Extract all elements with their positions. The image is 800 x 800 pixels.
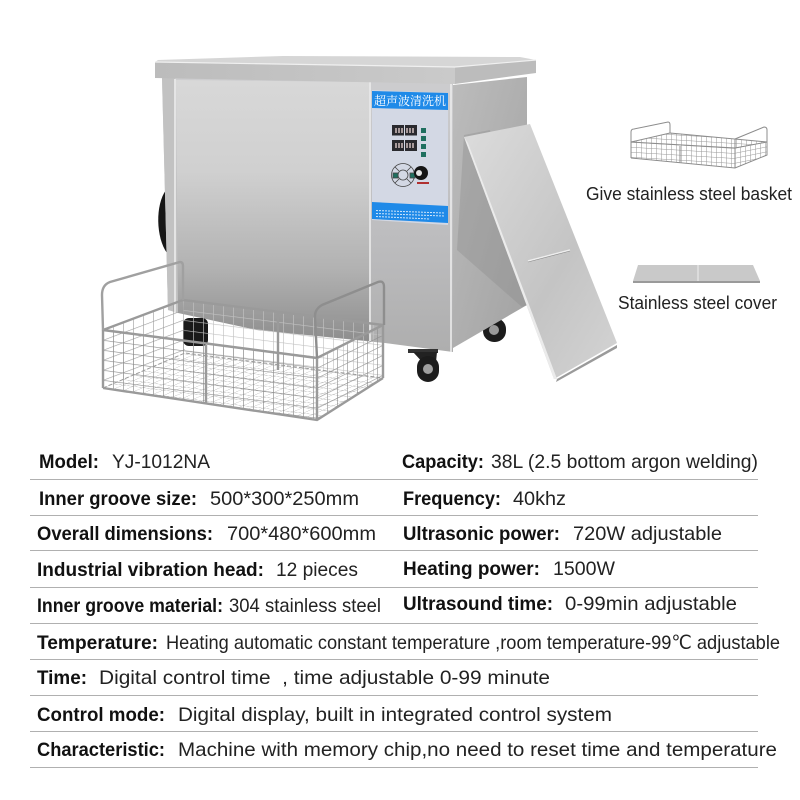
row: time: Digital control time , time adjustable 0-99 minute — [99, 667, 550, 689]
basket right handle — [315, 282, 384, 358]
row: ultrasonic power: Ultrasonic power: — [403, 524, 560, 545]
row: industrial vibration head: 12 pieces — [276, 559, 358, 581]
caption: basket: Give stainless steel basket — [586, 183, 792, 204]
row: model: Model: — [39, 452, 99, 473]
row: inner groove material — [37, 595, 381, 617]
caption: cover: Stainless steel cover — [618, 292, 777, 313]
row: inner groove size — [39, 488, 359, 510]
row: control mode: Digital display, built in integrated control system — [178, 704, 612, 726]
row: ultrasound time: 0-99min adjustable — [565, 593, 737, 615]
small basket thumbnail — [631, 122, 767, 168]
row: ultrasound time: Ultrasound time: — [403, 594, 553, 615]
row: ultrasonic power: 720W adjustable — [573, 523, 722, 545]
basket caster seen through mesh — [183, 318, 208, 346]
machine front body — [162, 78, 453, 352]
row: overall dimensions: Overall dimensions: — [37, 524, 213, 545]
blue panel heading: 超声波清洗机 — [374, 93, 446, 108]
row: ultrasound time — [403, 593, 737, 615]
circular control pad — [392, 164, 415, 186]
basket frame — [103, 300, 383, 420]
top rim — [155, 56, 536, 84]
row: temperature: Temperature: — [37, 633, 158, 654]
row: ultrasonic power — [403, 523, 722, 545]
foreground wire basket — [102, 262, 384, 420]
side handle — [158, 190, 167, 253]
row: frequency — [403, 488, 566, 510]
adjustment knob — [414, 166, 429, 184]
row: characteristic: Characteristic: — [37, 740, 165, 761]
row: inner groove size: 500*300*250mm — [210, 488, 359, 510]
row: frequency: 40khz — [513, 488, 566, 510]
blue notice strip — [372, 202, 448, 223]
row: industrial vibration head: Industrial vibration head: — [37, 560, 264, 581]
small cover thumbnail — [633, 265, 760, 283]
digital displays — [392, 125, 417, 151]
row: inner groove material: 304 stainless steel — [229, 595, 381, 617]
front caster wheel — [408, 349, 439, 382]
back caster wheel — [483, 318, 506, 342]
row: frequency: Frequency: — [403, 489, 501, 510]
front large panel — [176, 80, 369, 341]
control panel — [372, 90, 448, 225]
row: heating power — [403, 558, 616, 580]
row: capacity: Capacity: — [402, 452, 484, 473]
control buttons — [421, 128, 426, 157]
row: time: Time: — [37, 668, 87, 689]
row: overall dimensions — [37, 523, 376, 545]
basket mesh — [103, 300, 383, 420]
row: inner groove material: Inner groove material: — [37, 596, 223, 617]
machine right side — [453, 77, 527, 348]
row: heating power: Heating power: — [403, 559, 540, 580]
row: control mode: Control mode: — [37, 705, 165, 726]
ultrasonic cleaning machine — [155, 56, 536, 382]
machine lid — [464, 124, 617, 382]
row: overall dimensions: 700*480*600mm — [227, 523, 376, 545]
row: inner groove size: Inner groove size: — [39, 489, 197, 510]
row: model — [39, 451, 210, 473]
row: industrial vibration head — [37, 559, 358, 581]
row: capacity: 38L (2.5 bottom argon welding) — [491, 451, 758, 473]
row: characteristic: Machine with memory chip,no need to reset time and temperature — [178, 739, 777, 761]
lid shadow on side — [457, 130, 527, 307]
row: model: YJ-1012NA — [112, 451, 210, 473]
specification table — [30, 451, 780, 768]
row: heating power: 1500W — [553, 558, 616, 580]
left edge strip — [162, 78, 178, 313]
basket left handle — [102, 262, 183, 330]
